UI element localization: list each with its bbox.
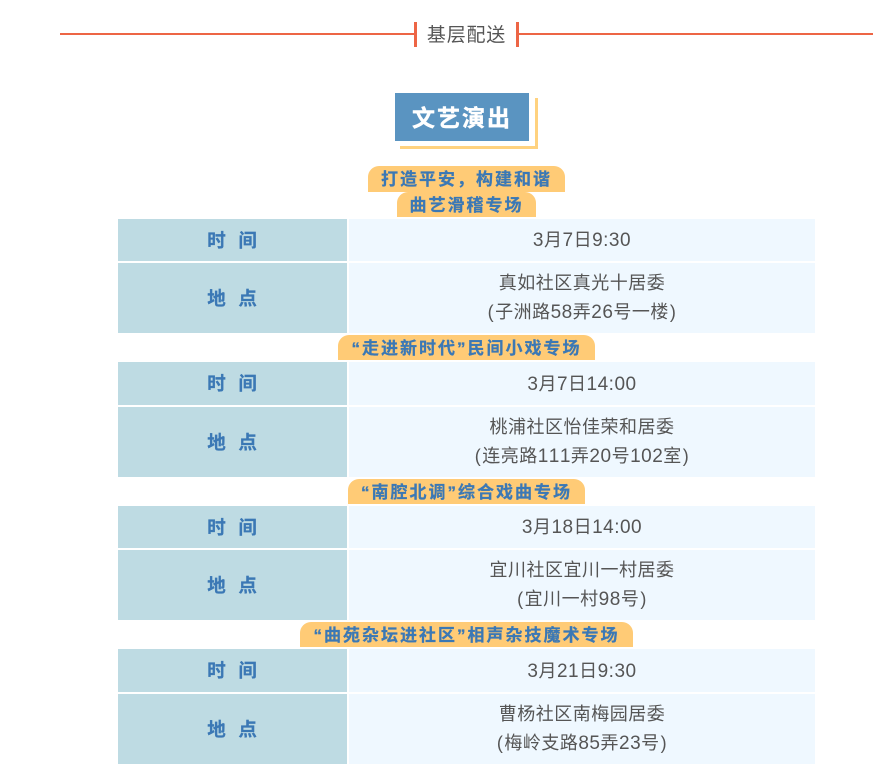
label: 地点: [118, 550, 347, 620]
label: 时间: 时 间: [207, 660, 258, 681]
event title: 南腔北调综合戏曲专场: “南腔北调”综合戏曲专场: [361, 483, 572, 502]
location value: 桃浦社区怡佳荣和居委: [490, 417, 674, 437]
location value: 真如社区真光十居委: [499, 273, 665, 293]
label: 地点: 地 点: [207, 432, 258, 453]
time value: [349, 219, 815, 261]
event title: 曲艺滑稽专场: 曲艺滑稽专场: [410, 196, 524, 215]
label: 地点: 地 点: [207, 575, 258, 596]
location value: [349, 263, 815, 333]
label: 地点: 地 点: [207, 719, 258, 740]
title badge: 文艺演出: [395, 93, 538, 149]
label: 时间: [118, 506, 347, 548]
label: 时间: [118, 362, 347, 405]
location value: 宜川社区宜川一村居委: [490, 560, 674, 580]
section header: 基层配送: 基层配送: [427, 25, 506, 46]
section header: 基层配送: [60, 22, 873, 47]
location value: [349, 407, 815, 477]
location value: (宜川一村98号): [517, 589, 647, 610]
time value: 3月7日14:00: [527, 374, 637, 395]
event title: 打造平安，构建和谐: [368, 166, 565, 192]
time value: 3月21日9:30: [527, 661, 637, 682]
location value: (梅岭支路85弄23号): [497, 733, 667, 754]
label: 地点: 地 点: [207, 288, 258, 309]
title badge: 文艺演出: 文艺演出: [412, 105, 512, 131]
event title: 走进新时代民间小戏专场: [338, 335, 595, 360]
time value: [349, 362, 815, 405]
label: 地点: [118, 694, 347, 764]
location value: [349, 694, 815, 764]
event title: 曲艺滑稽专场: [397, 192, 536, 217]
label: 地点: [118, 407, 347, 477]
label: 地点: [118, 263, 347, 333]
location value: [349, 550, 815, 620]
time value: 3月7日9:30: [533, 230, 631, 251]
location value: (连亮路111弄20号102室): [475, 446, 689, 467]
label: 时间: [118, 649, 347, 692]
location value: (子洲路58弄26号一楼): [488, 302, 676, 323]
label: 时间: 时 间: [207, 230, 258, 251]
label: 时间: [118, 219, 347, 261]
event title: 曲苑杂坛进社区相声杂技魔术专场: “曲苑杂坛进社区”相声杂技魔术专场: [314, 626, 620, 645]
label: 时间: 时 间: [207, 517, 258, 538]
event title: 南腔北调综合戏曲专场: [348, 479, 585, 504]
time value: 3月18日14:00: [522, 517, 642, 538]
time value: [349, 506, 815, 548]
time value: [349, 649, 815, 692]
event title: 曲苑杂坛进社区相声杂技魔术专场: [300, 622, 633, 647]
event title: 打造平安，构建和谐: 打造平安，构建和谐: [381, 170, 552, 189]
location value: 曹杨社区南梅园居委: [499, 704, 665, 724]
label: 时间: 时 间: [207, 373, 258, 394]
event title: 走进新时代民间小戏专场: “走进新时代”民间小戏专场: [352, 339, 582, 358]
